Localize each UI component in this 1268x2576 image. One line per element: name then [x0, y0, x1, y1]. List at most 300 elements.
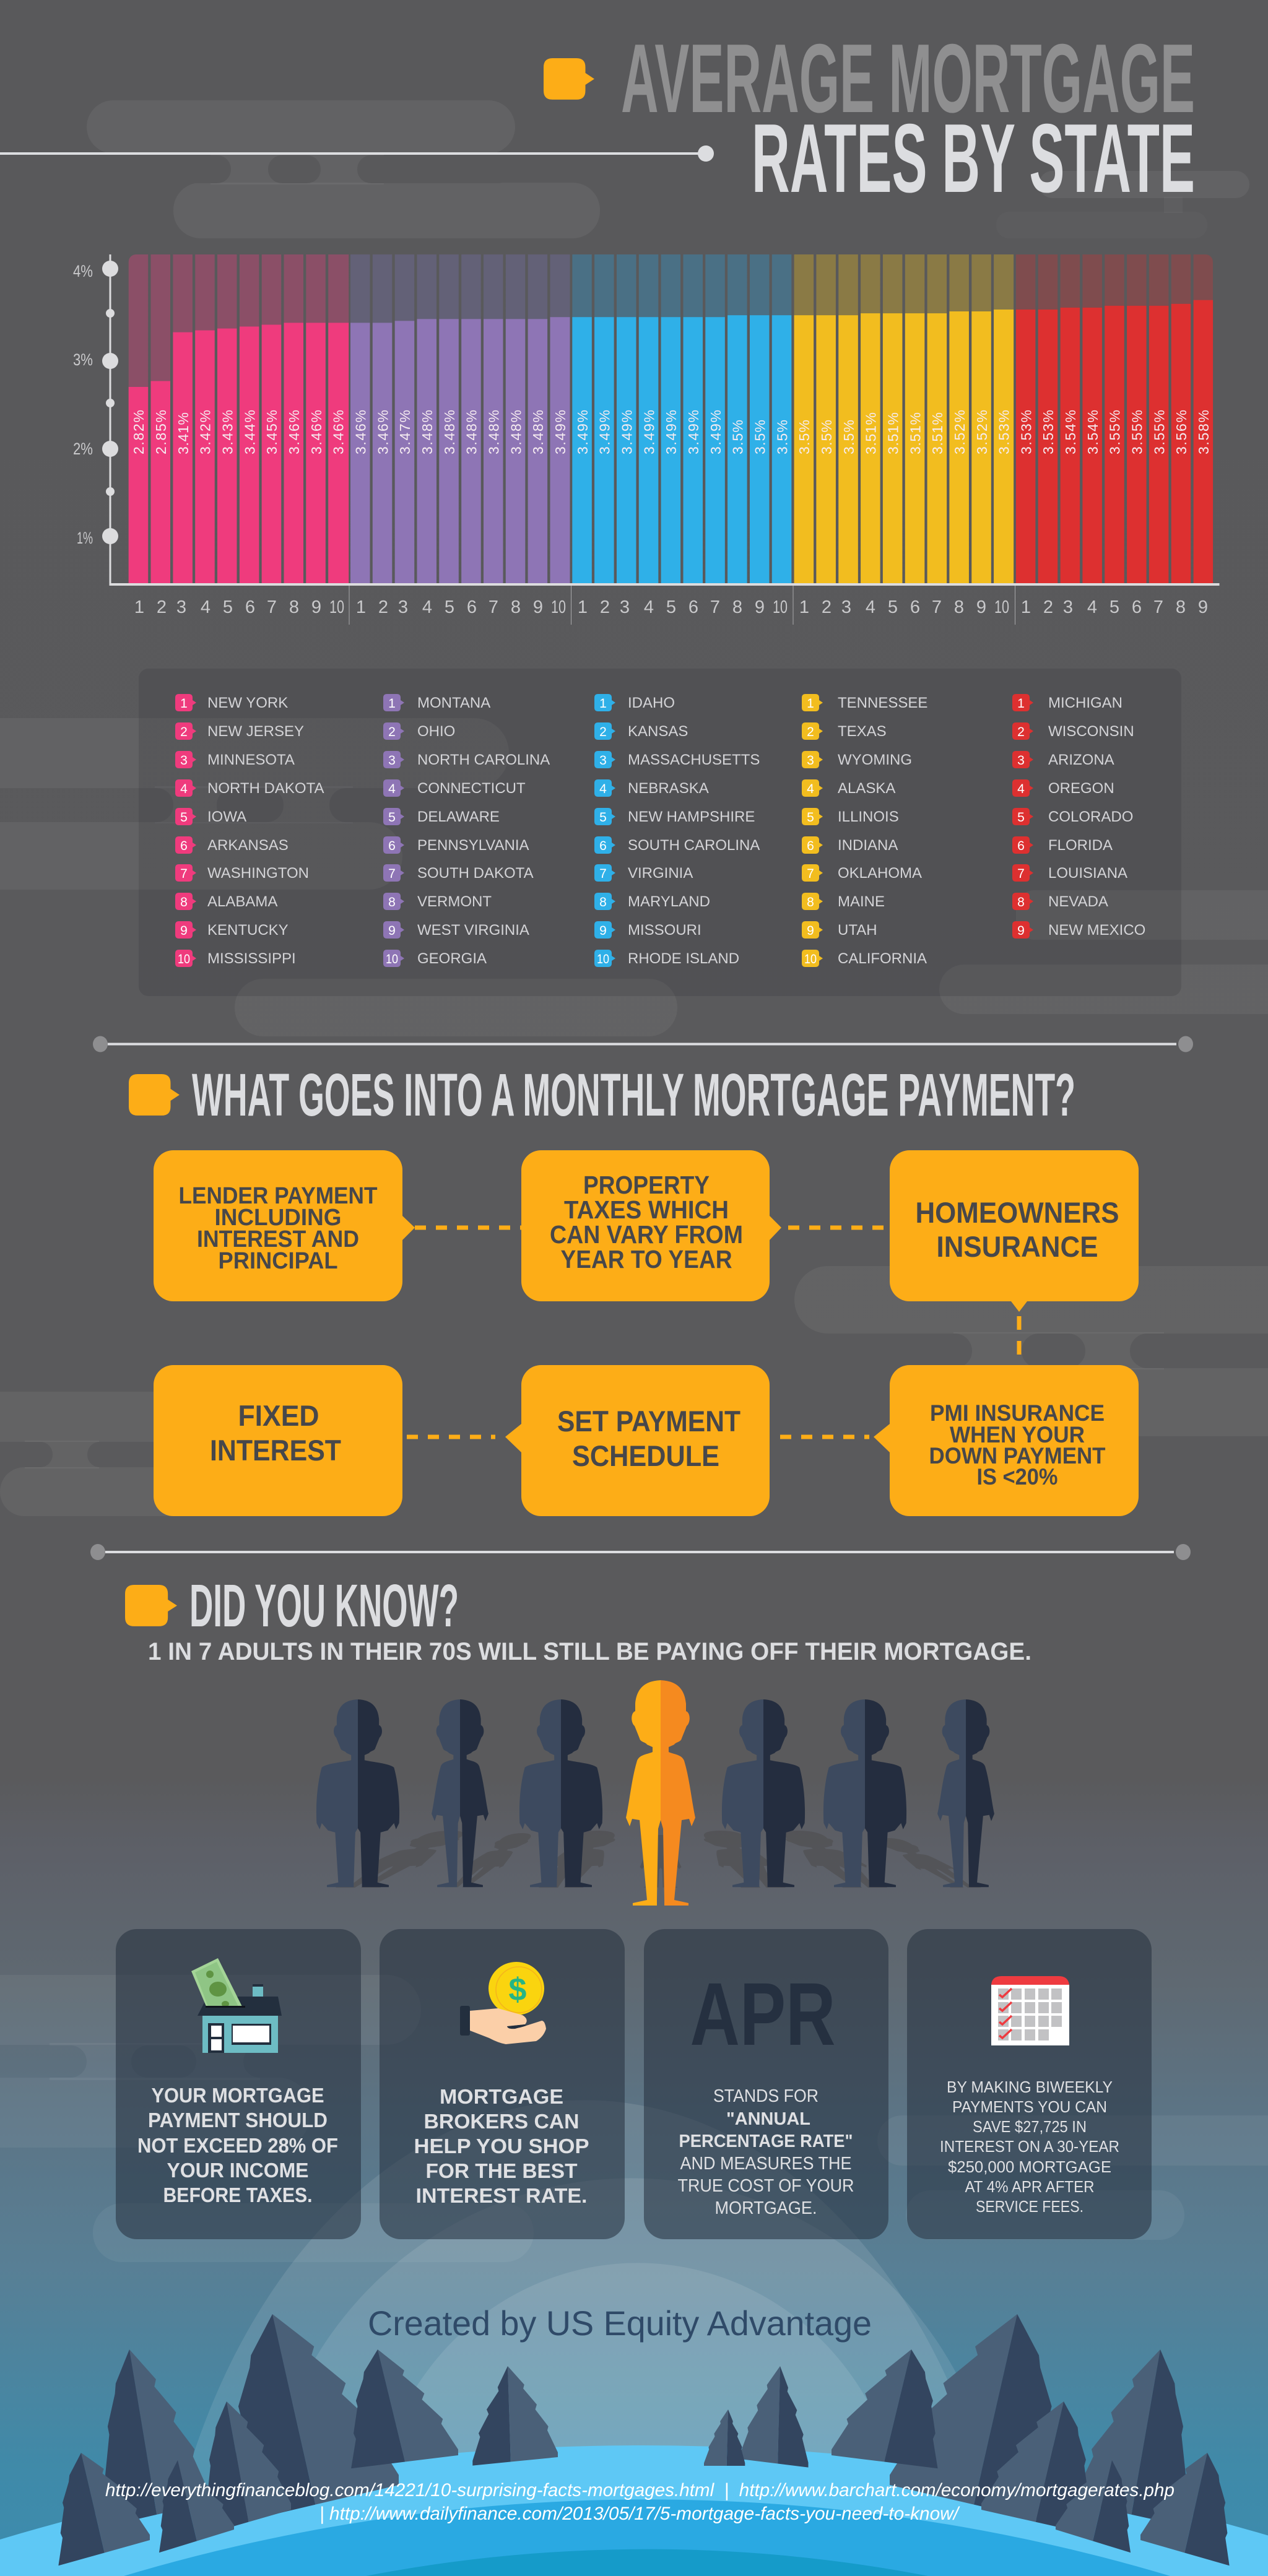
- icon: house with money: [191, 1958, 282, 2053]
- legend column: yellow: 7: [807, 867, 814, 881]
- legend column: blue: 1: [599, 696, 607, 711]
- legend column: pink: MINNESOTA: [207, 752, 295, 768]
- card 4 text: SERVICE FEES.: [976, 2197, 1083, 2216]
- bar value labels: 3.49%: [708, 410, 724, 454]
- bar value labels: 3.49%: [685, 410, 701, 454]
- legend column: yellow: 3: [807, 753, 814, 768]
- person 2: [432, 1699, 489, 1887]
- x axis rank labels: 5: [888, 597, 898, 617]
- legend column: red: [1012, 694, 1145, 939]
- card 2 text: [414, 2085, 589, 2207]
- legend column: purple: 1: [388, 696, 396, 711]
- legend column: pink: [175, 694, 324, 967]
- bar value labels: 3.55%: [1151, 410, 1167, 454]
- title block: [0, 24, 1195, 213]
- bar value labels: 3.41%: [175, 412, 191, 454]
- section divider 1: [93, 1036, 1193, 1052]
- bar value labels: 3.46%: [286, 410, 302, 454]
- box: homeowners insurance: INSURANCE: [936, 1230, 1098, 1263]
- bar value labels: 3.49%: [575, 410, 591, 454]
- bar value labels: 3.49%: [663, 410, 679, 454]
- bar value labels: 3.48%: [464, 410, 480, 454]
- legend column: blue: 2: [599, 725, 607, 739]
- x axis rank labels: 7: [932, 597, 942, 617]
- bar value labels: 3.51%: [885, 412, 901, 454]
- legend column: yellow: UTAH: [838, 922, 877, 939]
- legend column: red: COLORADO: [1048, 809, 1133, 825]
- legend column: pink: IOWA: [207, 809, 246, 825]
- legend column: blue: 6: [599, 839, 607, 853]
- bar value labels: 3.49%: [619, 410, 635, 454]
- legend column: blue: 3: [599, 753, 607, 768]
- x axis rank labels: 3: [176, 597, 186, 617]
- box: PMI insurance: IS <20%: [977, 1464, 1057, 1490]
- panel: card 2: [380, 1929, 625, 2239]
- chart axes: [102, 254, 1220, 625]
- card 4 text: PAYMENTS YOU CAN: [952, 2097, 1107, 2116]
- person 6: [823, 1699, 906, 1887]
- title rule: [0, 145, 714, 162]
- panel: card 1: [116, 1929, 361, 2239]
- x axis rank labels: 3: [398, 597, 408, 617]
- legend column: blue: 9: [599, 924, 607, 938]
- person 1: [316, 1699, 399, 1887]
- box: lender payment: PRINCIPAL: [218, 1248, 338, 1274]
- card 3 text: TRUE COST OF YOUR: [677, 2176, 854, 2196]
- legend column: purple: 10: [386, 952, 398, 966]
- bar value labels: 3.46%: [308, 410, 324, 454]
- x axis rank labels: 5: [223, 597, 233, 617]
- legend column: red: 2: [1017, 725, 1025, 739]
- x axis rank labels: 1: [134, 597, 144, 617]
- bar value labels: 3.5%: [819, 420, 835, 454]
- x axis rank labels: 10: [994, 597, 1009, 617]
- box: homeowners insurance: [890, 1150, 1139, 1301]
- legend column: yellow: WYOMING: [838, 752, 912, 768]
- x axis rank labels: 3: [1063, 597, 1073, 617]
- legend column: purple: MONTANA: [417, 695, 490, 711]
- bar value labels: 3.5%: [730, 420, 746, 454]
- legend column: red: 3: [1017, 753, 1025, 768]
- x axis rank labels: 6: [467, 597, 477, 617]
- source links: [105, 2480, 1175, 2524]
- legend column: yellow: TENNESSEE: [838, 695, 927, 711]
- legend column: pink: 1: [180, 696, 188, 711]
- y axis labels: 4%: [73, 262, 93, 280]
- card 3 text: PERCENTAGE RATE": [679, 2131, 853, 2151]
- card 3 text: [677, 2086, 854, 2218]
- footer: left trees: [58, 2284, 558, 2565]
- footer: right trees: [704, 2284, 1230, 2565]
- legend column: yellow: 4: [807, 782, 814, 796]
- heading: did you know: [125, 1572, 459, 1639]
- box: lender payment: INTEREST AND: [197, 1226, 359, 1252]
- card 3 text: AND MEASURES THE: [680, 2154, 852, 2174]
- x axis rank labels: 5: [1110, 597, 1119, 617]
- arrow: box 1 to box 2: [402, 1216, 521, 1240]
- bar value labels: 3.42%: [198, 410, 214, 454]
- legend column: pink: 6: [180, 839, 188, 853]
- bar value labels: 3.48%: [508, 410, 524, 454]
- bar value labels: 3.45%: [264, 410, 280, 454]
- box: set payment schedule: [521, 1365, 770, 1516]
- box: property taxes: TAXES WHICH: [564, 1195, 729, 1224]
- x axis rank labels: [134, 597, 1208, 617]
- legend column: red: WISCONSIN: [1048, 723, 1134, 740]
- x axis rank labels: 5: [445, 597, 454, 617]
- legend column: red: 8: [1017, 895, 1025, 909]
- footer: sky glow arcs: [163, 2100, 1007, 2576]
- bar value labels: 3.51%: [929, 412, 945, 454]
- legend column: blue: 10: [597, 952, 609, 966]
- x axis rank labels: 1: [1021, 597, 1031, 617]
- box: fixed interest: INTEREST: [210, 1434, 341, 1467]
- legend column: yellow: MAINE: [838, 893, 885, 910]
- legend column: pink: 10: [178, 952, 190, 966]
- legend column: yellow: OKLAHOMA: [838, 865, 922, 882]
- x axis rank labels: 2: [1043, 597, 1053, 617]
- APR graphic text: APR: [690, 1964, 836, 2064]
- credit line: Created by US Equity Advantage: [368, 2304, 872, 2343]
- x axis rank labels: 6: [245, 597, 255, 617]
- legend column: yellow: 6: [807, 839, 814, 853]
- bar value labels: 3.49%: [552, 410, 568, 454]
- x axis rank labels: 8: [1176, 597, 1186, 617]
- legend column: blue: IDAHO: [628, 695, 675, 711]
- card 2 text: MORTGAGE: [440, 2085, 563, 2108]
- card 4 text: $250,000 MORTGAGE: [948, 2158, 1111, 2176]
- x axis rank labels: 8: [289, 597, 299, 617]
- x axis rank labels: 7: [710, 597, 720, 617]
- x axis rank labels: 10: [773, 597, 788, 617]
- box: property taxes: [521, 1150, 770, 1301]
- legend column: purple: 8: [388, 895, 396, 909]
- person 3: [519, 1699, 602, 1887]
- legend column: yellow: ALASKA: [838, 780, 895, 797]
- arrow: box 3 to box 6: [1011, 1301, 1027, 1356]
- x axis rank labels: 9: [311, 597, 321, 617]
- box: lender payment: [154, 1150, 402, 1301]
- bar value labels: 3.51%: [863, 412, 879, 454]
- bar value labels: 3.47%: [397, 410, 413, 454]
- legend column: red: OREGON: [1048, 780, 1114, 797]
- flow chart: payment components: [154, 1150, 1139, 1516]
- x axis rank labels: 1: [356, 597, 366, 617]
- bar value labels: 3.48%: [530, 410, 546, 454]
- bar value labels: 3.44%: [241, 410, 258, 454]
- legend column: purple: CONNECTICUT: [417, 780, 526, 797]
- legend column: purple: [383, 694, 550, 967]
- x axis rank labels: 4: [422, 597, 432, 617]
- legend column: blue: MARYLAND: [628, 893, 710, 910]
- bar value labels: 3.46%: [353, 410, 369, 454]
- chart bars: pink group: [129, 254, 349, 584]
- legend column: yellow: [802, 694, 927, 967]
- panel: card 3: [644, 1929, 888, 2239]
- legend column: red: 1: [1017, 696, 1025, 711]
- footer: ground hills: [0, 2445, 1268, 2576]
- legend column: red: 6: [1017, 839, 1025, 853]
- box: fixed interest: FIXED: [238, 1399, 319, 1432]
- person 4: highlighted orange: [626, 1680, 695, 1906]
- legend column: purple: SOUTH DAKOTA: [417, 865, 534, 882]
- y axis labels: 1%: [77, 529, 93, 547]
- legend column: purple: 6: [388, 839, 396, 853]
- people graphic: 1 in 7: [316, 1680, 994, 1906]
- box: PMI insurance: DOWN PAYMENT: [929, 1443, 1106, 1468]
- legend column: yellow: ILLINOIS: [838, 809, 899, 825]
- legend column: red: 5: [1017, 810, 1025, 825]
- bar value labels: 3.46%: [375, 410, 391, 454]
- legend column: blue: KANSAS: [628, 723, 688, 740]
- card 2 text: HELP YOU SHOP: [414, 2135, 589, 2158]
- box: property taxes: CAN VARY FROM: [550, 1220, 743, 1249]
- legend column: pink: 8: [180, 895, 188, 909]
- x axis rank labels: 4: [1087, 597, 1097, 617]
- legend column: blue: SOUTH CAROLINA: [628, 837, 760, 854]
- card 1 text: NOT EXCEED 28% OF: [137, 2134, 338, 2157]
- bar value labels: 3.51%: [907, 412, 923, 454]
- heading: did you know: DID YOU KNOW?: [189, 1572, 459, 1639]
- statistic sentence: 1 IN 7 ADULTS IN THEIR 70S WILL STILL BE PAYING OFF THEIR MORTGAGE.: [148, 1638, 1031, 1665]
- legend column: purple: 2: [388, 725, 396, 739]
- x axis rank labels: 9: [533, 597, 543, 617]
- box: PMI insurance: PMI INSURANCE: [930, 1400, 1105, 1426]
- card 2 text: INTEREST RATE.: [416, 2184, 587, 2207]
- chart bars: red group: [1016, 254, 1213, 584]
- bar value labels: 3.48%: [441, 410, 458, 454]
- legend column: red: NEVADA: [1048, 893, 1108, 910]
- legend column: purple: 7: [388, 867, 396, 881]
- legend column: purple: GEORGIA: [417, 950, 487, 967]
- bar value labels: 3.5%: [774, 420, 790, 454]
- bar value labels: 3.48%: [485, 410, 502, 454]
- legend column: purple: PENNSYLVANIA: [417, 837, 529, 854]
- x axis rank labels: 8: [511, 597, 521, 617]
- legend column: pink: WASHINGTON: [207, 865, 309, 882]
- legend column: red: 4: [1017, 782, 1025, 796]
- x axis rank labels: 7: [1153, 597, 1163, 617]
- bar value labels: [131, 410, 1212, 454]
- card 3 text: MORTGAGE.: [714, 2198, 817, 2218]
- legend column: red: MICHIGAN: [1048, 695, 1123, 711]
- legend column: red: ARIZONA: [1048, 752, 1114, 768]
- legend column: blue: NEBRASKA: [628, 780, 709, 797]
- x axis rank labels: 7: [489, 597, 498, 617]
- y axis labels: 2%: [73, 440, 93, 458]
- box: lender payment: LENDER PAYMENT: [178, 1183, 378, 1209]
- chart bars: purple group: [350, 254, 570, 584]
- bar value labels: 2.82%: [131, 410, 147, 454]
- icon: title tag: [544, 58, 594, 100]
- legend column: yellow: CALIFORNIA: [838, 950, 927, 967]
- chart bars: yellow group: [794, 254, 1014, 584]
- legend column: pink: ARKANSAS: [207, 837, 289, 854]
- legend column: pink: 7: [180, 867, 188, 881]
- x axis rank labels: 2: [822, 597, 832, 617]
- legend column: purple: VERMONT: [417, 893, 492, 910]
- legend column: blue: NEW HAMPSHIRE: [628, 809, 755, 825]
- legend column: blue: 5: [599, 810, 607, 825]
- person 7: [937, 1699, 994, 1887]
- person 5: [722, 1699, 805, 1887]
- bar value labels: 3.55%: [1129, 410, 1145, 454]
- card 2 text: FOR THE BEST: [426, 2159, 577, 2182]
- legend column: blue: [594, 694, 760, 967]
- legend column: blue: RHODE ISLAND: [628, 950, 739, 967]
- legend column: pink: NEW JERSEY: [207, 723, 304, 740]
- legend column: purple: DELAWARE: [417, 809, 500, 825]
- card 4 text: INTEREST ON A 30-YEAR: [940, 2137, 1119, 2156]
- legend column: yellow: 10: [804, 952, 817, 966]
- bar value labels: 2.85%: [153, 410, 169, 454]
- bar value labels: 3.5%: [752, 420, 768, 454]
- legend column: pink: NEW YORK: [207, 695, 288, 711]
- card 2 text: BROKERS CAN: [423, 2110, 580, 2133]
- x axis rank labels: 3: [620, 597, 630, 617]
- bar value labels: 3.52%: [952, 410, 968, 454]
- legend column: yellow: TEXAS: [838, 723, 887, 740]
- legend column: pink: MISSISSIPPI: [207, 950, 296, 967]
- legend column: blue: 7: [599, 867, 607, 881]
- x axis rank labels: 1: [578, 597, 588, 617]
- legend column: red: LOUISIANA: [1048, 865, 1127, 882]
- legend column: pink: 2: [180, 725, 188, 739]
- card 1 text: YOUR INCOME: [167, 2159, 308, 2182]
- x axis rank labels: 4: [201, 597, 211, 617]
- legend column: pink: 4: [180, 782, 188, 796]
- x axis rank labels: 3: [841, 597, 851, 617]
- x axis rank labels: 4: [866, 597, 875, 617]
- arrow: box 5 to box 4: [407, 1424, 521, 1452]
- x axis rank labels: 6: [1132, 597, 1142, 617]
- legend column: pink: 5: [180, 810, 188, 825]
- card 3 text: STANDS FOR: [713, 2086, 819, 2106]
- box: set payment schedule: SCHEDULE: [572, 1439, 719, 1472]
- card 3 text: "ANNUAL: [726, 2109, 810, 2129]
- x axis rank labels: 7: [267, 597, 277, 617]
- people ground shadows: [330, 1831, 985, 1888]
- y axis labels: [73, 262, 93, 547]
- source links: http://everythingfinanceblog.com/14221/10-surprising-facts-mortgages.html | http://www.barchart.com/economy/mortgagerates.php: [105, 2480, 1175, 2500]
- card 1 text: YOUR MORTGAGE: [151, 2084, 324, 2107]
- y axis labels: 3%: [73, 350, 93, 369]
- legend column: red: 9: [1017, 924, 1025, 938]
- legend column: pink: ALABAMA: [207, 893, 277, 910]
- bar value labels: 3.54%: [1062, 410, 1079, 454]
- box: lender payment: INCLUDING: [214, 1205, 342, 1231]
- bar value labels: 3.49%: [597, 410, 613, 454]
- box: homeowners insurance: HOMEOWNERS: [915, 1196, 1119, 1229]
- panel: card 4: [907, 1929, 1152, 2239]
- card 4 text: [940, 2078, 1119, 2216]
- legend column: purple: 3: [388, 753, 396, 768]
- bar value labels: 3.5%: [796, 420, 812, 454]
- card 1 text: [137, 2084, 338, 2206]
- bar value labels: 3.46%: [331, 410, 347, 454]
- x axis rank labels: 10: [329, 597, 344, 617]
- bar value labels: 3.43%: [219, 410, 235, 454]
- card 4 text: SAVE $27,725 IN: [973, 2117, 1087, 2136]
- x axis rank labels: 2: [600, 597, 610, 617]
- legend column: purple: 4: [388, 782, 396, 796]
- card 4 text: AT 4% APR AFTER: [965, 2177, 1095, 2196]
- legend column: pink: 3: [180, 753, 188, 768]
- legend column: pink: NORTH DAKOTA: [207, 780, 324, 797]
- x axis rank labels: 9: [755, 597, 765, 617]
- box: set payment schedule: SET PAYMENT: [557, 1405, 740, 1438]
- bar value labels: 3.53%: [1040, 410, 1056, 454]
- box: fixed interest: [154, 1365, 402, 1516]
- legend column: purple: 5: [388, 810, 396, 825]
- bar value labels: 3.58%: [1196, 410, 1212, 454]
- bar value labels: 3.55%: [1107, 410, 1123, 454]
- arrow: box 2 to box 3: [770, 1216, 890, 1240]
- x axis rank labels: 2: [378, 597, 388, 617]
- legend column: blue: VIRGINIA: [628, 865, 693, 882]
- legend column: purple: 9: [388, 924, 396, 938]
- x axis rank labels: 10: [551, 597, 566, 617]
- legend column: yellow: 9: [807, 924, 814, 938]
- legend column: red: NEW MEXICO: [1048, 922, 1145, 939]
- bar value labels: 3.5%: [841, 420, 857, 454]
- bar value labels: 3.54%: [1085, 410, 1101, 454]
- x axis rank labels: 6: [910, 597, 920, 617]
- box: property taxes: PROPERTY: [583, 1171, 710, 1199]
- legend column: red: FLORIDA: [1048, 837, 1113, 854]
- icon: hand holding coin: [460, 1962, 546, 2044]
- legend column: yellow: 8: [807, 895, 814, 909]
- arrow: box 6 to box 5: [780, 1424, 890, 1452]
- box: PMI insurance: [890, 1365, 1139, 1516]
- bar value labels: 3.48%: [419, 410, 435, 454]
- legend column: pink: KENTUCKY: [207, 922, 289, 939]
- x axis rank labels: 4: [644, 597, 654, 617]
- bar value labels: 3.49%: [641, 410, 657, 454]
- icon: hand holding coin: $: [509, 1972, 527, 2008]
- card 4 text: BY MAKING BIWEEKLY: [947, 2078, 1113, 2096]
- x axis rank labels: 1: [799, 597, 809, 617]
- x axis rank labels: 8: [732, 597, 742, 617]
- x axis rank labels: 8: [954, 597, 964, 617]
- panel: state legend: [139, 669, 1181, 996]
- legend column: purple: NORTH CAROLINA: [417, 752, 550, 768]
- legend column: yellow: 1: [807, 696, 814, 711]
- x axis rank labels: 9: [1198, 597, 1208, 617]
- bar value labels: 3.52%: [974, 410, 990, 454]
- box: property taxes: YEAR TO YEAR: [561, 1245, 732, 1273]
- legend column: purple: OHIO: [417, 723, 455, 740]
- legend column: purple: WEST VIRGINIA: [417, 922, 529, 939]
- x axis rank labels: 5: [666, 597, 676, 617]
- card 1 text: BEFORE TAXES.: [163, 2184, 312, 2206]
- bar value labels: 3.53%: [996, 410, 1012, 454]
- legend column: yellow: 5: [807, 810, 814, 825]
- legend column: pink: 9: [180, 924, 188, 938]
- icon: calendar: [991, 1976, 1069, 2045]
- x axis rank labels: 6: [688, 597, 698, 617]
- bar value labels: 3.56%: [1173, 410, 1189, 454]
- legend column: blue: MASSACHUSETTS: [628, 752, 760, 768]
- x axis rank labels: 9: [976, 597, 986, 617]
- legend column: blue: 4: [599, 782, 607, 796]
- legend column: yellow: INDIANA: [838, 837, 898, 854]
- chart bars: blue group: [572, 254, 791, 584]
- legend column: blue: MISSOURI: [628, 922, 701, 939]
- bar value labels: 3.53%: [1018, 410, 1034, 454]
- card 1 text: PAYMENT SHOULD: [148, 2109, 328, 2131]
- section divider 2: [90, 1544, 1191, 1560]
